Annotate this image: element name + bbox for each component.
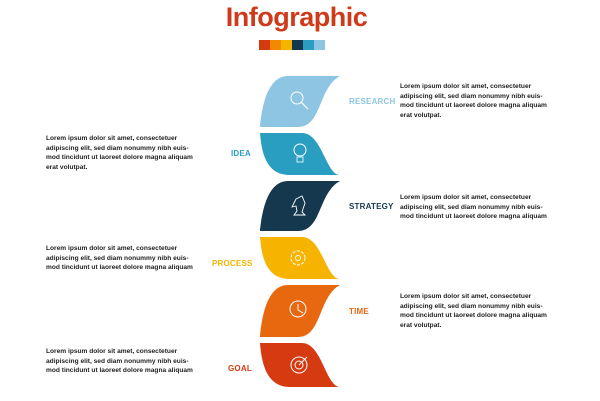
color legend bar — [259, 40, 325, 50]
text: time: Lorem ipsum dolor sit amet, consectetuer adipiscing elit, sed diam nonummy nibh euis-mod tincidunt ut laoreet dolore magna aliquam erat volutpat. — [400, 293, 547, 329]
label: research: RESEARCH — [349, 97, 396, 106]
label: time: TIME — [349, 307, 369, 316]
text: process: Lorem ipsum dolor sit amet, consectetuer adipiscing elit, sed diam nonummy nibh euis-mod tincidunt ut laoreet dolore magna aliquam — [46, 245, 193, 271]
segment: time — [260, 285, 340, 337]
segment: strategy — [260, 181, 340, 231]
segment: idea — [260, 133, 340, 175]
segment: research — [260, 76, 340, 127]
label: idea: IDEA — [231, 149, 251, 158]
label: process: PROCESS — [212, 259, 253, 268]
label: goal: GOAL — [228, 364, 252, 373]
text: research: Lorem ipsum dolor sit amet, consectetuer adipiscing elit, sed diam nonummy nibh euis-mod tincidunt ut laoreet dolore magna aliquam erat volutpat. — [400, 83, 547, 119]
text: strategy: Lorem ipsum dolor sit amet, consectetuer adipiscing elit, sed diam nonummy nibh euis-mod tincidunt ut laoreet dolore magna aliquam — [400, 194, 547, 220]
segment: goal — [260, 343, 340, 387]
text: goal: Lorem ipsum dolor sit amet, consectetuer adipiscing elit, sed diam nonummy nibh euis-mod tincidunt ut laoreet dolore magna aliquam — [46, 348, 193, 374]
segment: process — [260, 237, 340, 279]
text: idea: Lorem ipsum dolor sit amet, consectetuer adipiscing elit, sed diam nonummy nibh euis-mod tincidunt ut laoreet dolore magna aliquam erat volutpat. — [46, 135, 193, 171]
title: Infographic — [226, 2, 367, 32]
label: strategy: STRATEGY — [349, 202, 394, 211]
